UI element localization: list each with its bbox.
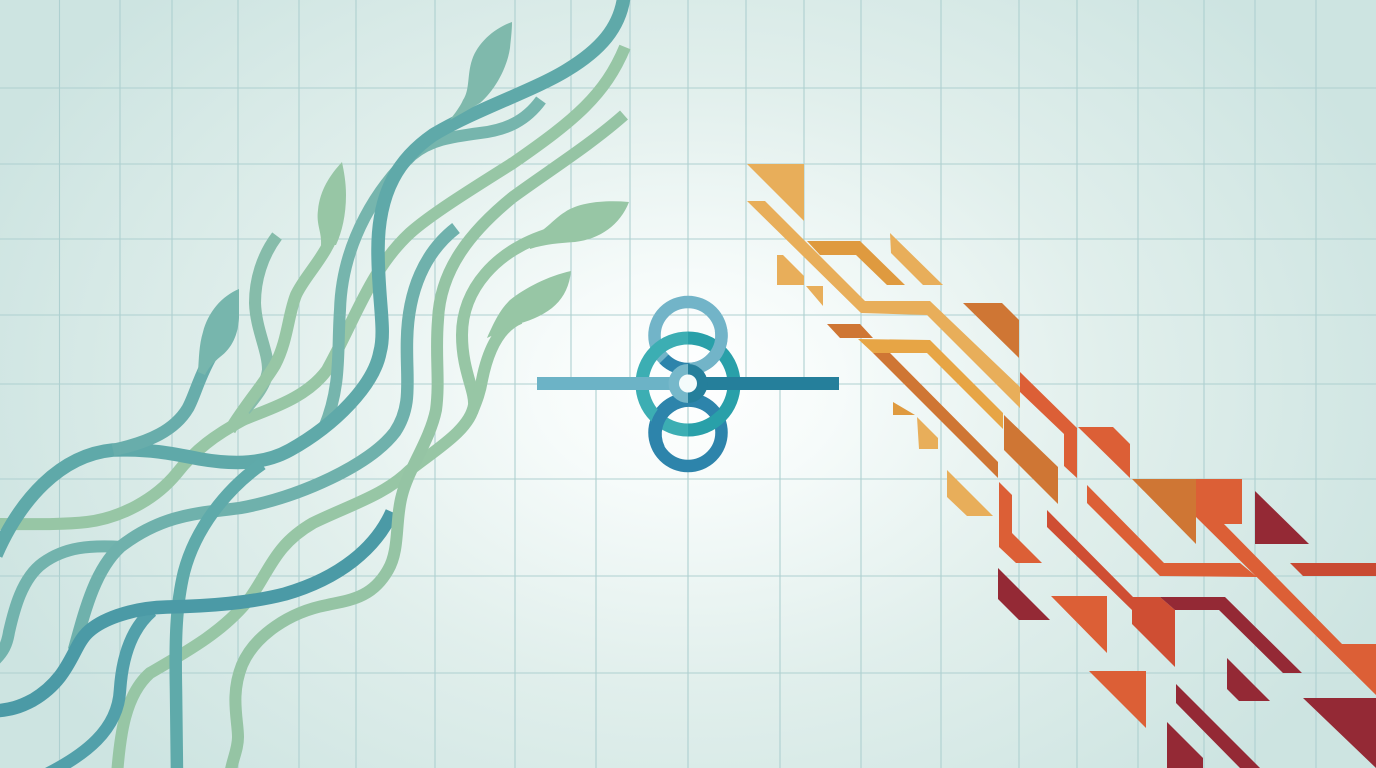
gold stripe: [858, 339, 1003, 429]
lower teal strand: [45, 611, 152, 768]
main teal strand: [0, 0, 624, 555]
bar: left half: [537, 377, 688, 390]
upper light teal strand: [324, 100, 541, 428]
vertical teal strand: [176, 464, 262, 768]
sage strands below teal: [0, 47, 625, 768]
leaf: teal lower left: [198, 289, 239, 375]
leaf: sage right lower: [487, 271, 571, 338]
leaf: sage right upper: [528, 201, 629, 249]
ring: bottom: [654, 399, 722, 466]
central ring and bar symbol: [537, 302, 839, 466]
leaf: sage centre: [318, 162, 346, 245]
sage leaf stem: [230, 225, 336, 430]
branch with teal leaf stem: [113, 358, 210, 450]
deep orange shards: [1290, 563, 1376, 576]
geometric shards: [747, 164, 1376, 768]
organic flowing strands: [0, 0, 625, 768]
leaf: top teal: [450, 22, 512, 120]
sage strand on top: [230, 115, 624, 768]
amber shards: [747, 164, 1020, 516]
light teal branch: [0, 546, 122, 660]
burnt orange shards: [827, 303, 1196, 544]
ring: large centre: [642, 338, 734, 430]
ring: small centre: [674, 370, 702, 398]
red-orange shards: [999, 372, 1376, 728]
interlocking arcs: [656, 330, 721, 449]
ring: top: [654, 302, 722, 369]
mid teal strand: [74, 228, 456, 650]
dark amber shards: [807, 241, 905, 285]
bar: right half: [688, 377, 839, 390]
stem ending at upper left: [245, 236, 277, 410]
crimson shards: [998, 491, 1376, 768]
dark teal strand: [0, 512, 392, 711]
